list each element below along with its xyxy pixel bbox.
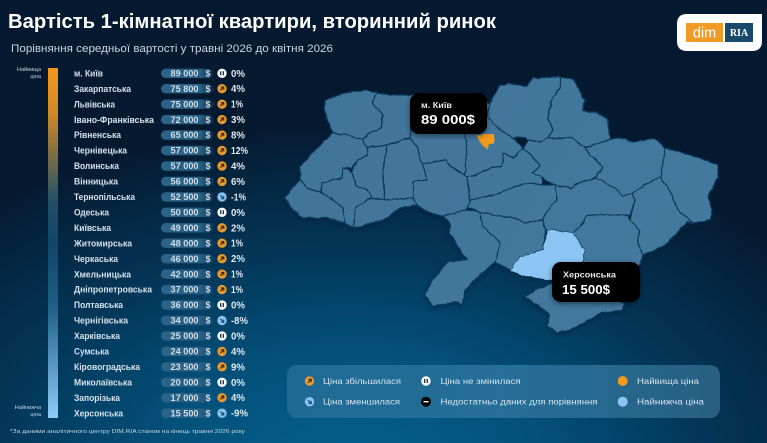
row: Odesa: Одеська (74, 208, 109, 218)
row: Mykolaiv: 20 000 (170, 377, 198, 387)
subtitle: Порівняння середньої вартості у травні 2026 до квітня 2026 (11, 43, 333, 55)
row: Sumy: Сумська (74, 346, 109, 356)
row: Poltava: 0% (231, 300, 245, 312)
row: Zakarpattia (74, 84, 245, 95)
row: Vinnytsia: $ (206, 177, 211, 187)
row: Zhytomyr: 48 000 (170, 238, 198, 248)
row: Poltava: 36 000 (170, 300, 198, 310)
row: Khmelnytskyi: 42 000 (170, 269, 198, 279)
row: Kherson: $ (206, 408, 211, 418)
row: Chernihiv: Чернігівська (74, 316, 128, 326)
row: Zakarpattia: 4% (231, 84, 245, 95)
region: Lviv (300, 133, 367, 193)
color scale: highest to lowest price: ціна (30, 74, 42, 80)
legend: not enough data: Недостатньо даних для порівняння (440, 397, 598, 407)
row: Ivano-Frankivsk: $ (206, 115, 211, 125)
row: Kyiv city: $ (206, 68, 211, 78)
color scale: highest to lowest price: Найнижча (15, 404, 42, 411)
row: Kharkiv (74, 331, 245, 342)
row: Volyn: 57 000 (170, 161, 198, 171)
region: Kharkiv (585, 138, 665, 197)
region: Kyiv city, highest price (476, 134, 494, 150)
region: Poltava (523, 138, 603, 188)
row: Zhytomyr: Житомирська (73, 238, 132, 248)
row: Chernivtsi: 12% (231, 146, 248, 157)
row: Kherson: 15 500 (170, 408, 198, 418)
row: Chernivtsi (74, 146, 248, 157)
row: Zaporizhzhia: Запорізька (74, 393, 120, 403)
row: Chernihiv: 34 000 (170, 316, 198, 326)
row: Kirovohrad: $ (206, 362, 211, 372)
row: Zhytomyr: 1% (231, 239, 243, 250)
row: Dnipropetrovsk: 1% (231, 285, 243, 296)
row: Chernihiv: -8% (231, 316, 248, 327)
row: Kirovohrad (74, 362, 245, 373)
region: Vinnytsia (413, 160, 470, 216)
legend: price increased: Ціна збільшилася (323, 376, 401, 386)
callout: Kyiv city: 89 000$ (421, 112, 476, 127)
row: Zaporizhzhia: $ (206, 393, 211, 403)
footnote: *За даними аналітичного центру DIM.RIA станом на кінець травня 2026 року (10, 429, 245, 435)
row: Ternopil: $ (206, 192, 211, 202)
row: Zaporizhzhia (74, 393, 245, 404)
row: Chernivtsi: 57 000 (170, 146, 198, 156)
row: Rivne: 8% (231, 131, 245, 142)
row: Chernivtsi: Чернівецька (74, 146, 127, 156)
region: Donetsk (630, 177, 693, 255)
row: Dnipropetrovsk: $ (206, 285, 211, 295)
row: Ivano-Frankivsk: 72 000 (170, 115, 198, 125)
row: Khmelnytskyi: 1% (231, 270, 243, 281)
logo: dim.ria: RIA (730, 28, 749, 39)
row: Sumy (74, 346, 245, 358)
row: Cherkasy (74, 254, 245, 265)
row: Kyiv city: м. Київ (74, 68, 104, 78)
row: Ternopil: 52 500 (170, 192, 198, 202)
row: Rivne: Рівненська (74, 130, 121, 140)
logo: dim.ria (677, 14, 762, 51)
region: Chernihiv (488, 77, 560, 142)
row: Zhytomyr: $ (206, 238, 211, 248)
row: Mykolaiv: Миколаївська (74, 377, 132, 387)
row: Kherson: -9% (231, 409, 248, 420)
row: Zaporizhzhia: 4% (231, 393, 245, 404)
row: Mykolaiv: $ (206, 377, 211, 387)
region: Ivano-Frankivsk (322, 168, 372, 228)
row: Cherkasy: 2% (231, 254, 245, 265)
region: Cherkasy (467, 148, 542, 200)
region: Zaporizhzhia (555, 215, 643, 290)
row: Kherson: Херсонська (74, 408, 123, 418)
row: Odesa: 0% (231, 208, 245, 219)
row: Kyiv oblast (74, 223, 245, 234)
row: Poltava: $ (206, 300, 211, 310)
row: Sumy: 4% (231, 347, 245, 358)
row: Sumy: 24 000 (170, 346, 198, 356)
row: Khmelnytskyi: Хмельницька (74, 269, 131, 279)
row: Volyn (74, 161, 245, 172)
row: Odesa: 50 000 (170, 208, 198, 218)
row: Lviv: $ (206, 99, 211, 109)
row: Khmelnytskyi: $ (206, 269, 211, 279)
row: Kharkiv: Харківська (74, 331, 120, 341)
callout: Kyiv city (410, 93, 487, 134)
region: Kyiv oblast (460, 100, 523, 177)
row: Cherkasy: Черкаська (74, 254, 118, 264)
color scale: highest to lowest price: Найвища (17, 66, 42, 73)
row: Zhytomyr (73, 238, 243, 250)
map of Ukraine (285, 77, 718, 333)
legend: lowest price: Найнижча ціна (637, 397, 704, 407)
row: Poltava: Полтавська (74, 300, 123, 310)
row: Kyiv city (74, 68, 245, 80)
region: Rivne (362, 93, 425, 148)
row: Lviv: 75 000 (170, 99, 198, 109)
row: Lviv: Львівська (74, 99, 115, 109)
legend: price decreased: Ціна зменшилася (323, 397, 400, 407)
row: Ivano-Frankivsk (74, 115, 245, 126)
region: Odesa (425, 210, 500, 306)
row: Kharkiv: 0% (231, 331, 245, 342)
row: Kharkiv: $ (206, 331, 211, 341)
row: Dnipropetrovsk: Дніпропетровська (74, 285, 152, 295)
row: Zakarpattia: Закарпатська (74, 84, 131, 94)
row: Cherkasy: $ (206, 254, 211, 264)
row: Kirovohrad: 9% (231, 362, 245, 373)
row: Dnipropetrovsk (74, 285, 243, 296)
row: Ivano-Frankivsk: 3% (231, 115, 245, 126)
legend: price unchanged: Ціна не змінилася (440, 376, 521, 386)
legend: lowest price (618, 397, 704, 407)
row: Odesa: $ (206, 208, 211, 218)
row: Sumy: $ (206, 346, 211, 356)
row: Chernihiv (74, 316, 248, 327)
region: Luhansk (660, 148, 718, 223)
row: Vinnytsia: 6% (231, 177, 245, 188)
row: Kyiv oblast: 49 000 (170, 223, 198, 233)
row: Mykolaiv (74, 377, 245, 389)
ranking table (73, 68, 248, 420)
row: Kyiv city: 0% (231, 69, 245, 80)
row: Volyn: Волинська (74, 161, 119, 171)
row: Rivne: 65 000 (170, 130, 198, 140)
row: Kyiv oblast: Київська (74, 223, 111, 233)
region: Kherson, lowest price (510, 230, 585, 280)
region: Dnipropetrovsk (543, 178, 635, 233)
row: Vinnytsia: Вінницька (74, 177, 118, 187)
row: Ternopil (74, 192, 246, 203)
row: Kyiv oblast: 2% (231, 223, 245, 234)
callout: Kherson: Херсонська (563, 270, 617, 280)
region: Ternopil (352, 145, 387, 200)
row: Cherkasy: 46 000 (170, 254, 198, 264)
row: Volyn: $ (206, 161, 211, 171)
row: Mykolaiv: 0% (231, 378, 245, 389)
region: Khmelnytskyi (383, 138, 427, 200)
row: Ivano-Frankivsk: Івано-Франківська (74, 115, 154, 125)
row: Lviv: 1% (231, 100, 243, 111)
row: Chernihiv: $ (206, 316, 211, 326)
callout: Kherson: 15 500$ (562, 282, 611, 297)
row: Vinnytsia (74, 177, 245, 188)
callout: Kyiv city: м. Київ (421, 101, 452, 110)
legend: highest price: Найвища ціна (637, 376, 699, 386)
region: Volyn (325, 90, 383, 140)
legend: highest price (618, 376, 699, 386)
color scale: highest to lowest price (15, 66, 58, 418)
callout: Kherson (552, 262, 640, 302)
region: Zakarpattia (285, 180, 345, 223)
row: Poltava (74, 300, 245, 312)
region: Crimea (525, 283, 625, 333)
row: Zaporizhzhia: 17 000 (170, 393, 198, 403)
row: Lviv (74, 99, 243, 111)
row: Zakarpattia: $ (206, 84, 211, 94)
logo: dim.ria: dim (693, 26, 716, 42)
row: Volyn: 4% (231, 162, 245, 172)
region: Kirovohrad (467, 183, 557, 223)
row: Kirovohrad: 23 500 (170, 362, 198, 372)
region: Sumy (548, 77, 610, 148)
row: Ternopil: Тернопільська (74, 192, 135, 202)
row: Ternopil: -1% (231, 192, 246, 203)
row: Rivne: $ (206, 130, 211, 140)
legend panel (287, 365, 720, 418)
row: Kyiv oblast: $ (206, 223, 211, 233)
row: Chernivtsi: $ (206, 146, 211, 156)
row: Kharkiv: 25 000 (170, 331, 198, 341)
row: Vinnytsia: 56 000 (170, 177, 198, 187)
title: Вартість 1-кімнатної квартири, вторинний ринок (8, 10, 497, 33)
row: Zakarpattia: 75 800 (170, 84, 198, 94)
region: Mykolaiv (480, 212, 545, 270)
row: Dnipropetrovsk: 37 000 (170, 285, 198, 295)
row: Odesa (74, 208, 245, 219)
region: Chernivtsi (353, 198, 417, 228)
row: Kherson (74, 408, 248, 420)
region: Zhytomyr (410, 97, 467, 175)
row: Khmelnytskyi (74, 269, 243, 281)
row: Kyiv city: 89 000 (170, 68, 198, 78)
color scale: highest to lowest price: ціна (30, 412, 42, 418)
row: Rivne (74, 130, 245, 142)
row: Kirovohrad: Кіровоградська (74, 362, 140, 372)
